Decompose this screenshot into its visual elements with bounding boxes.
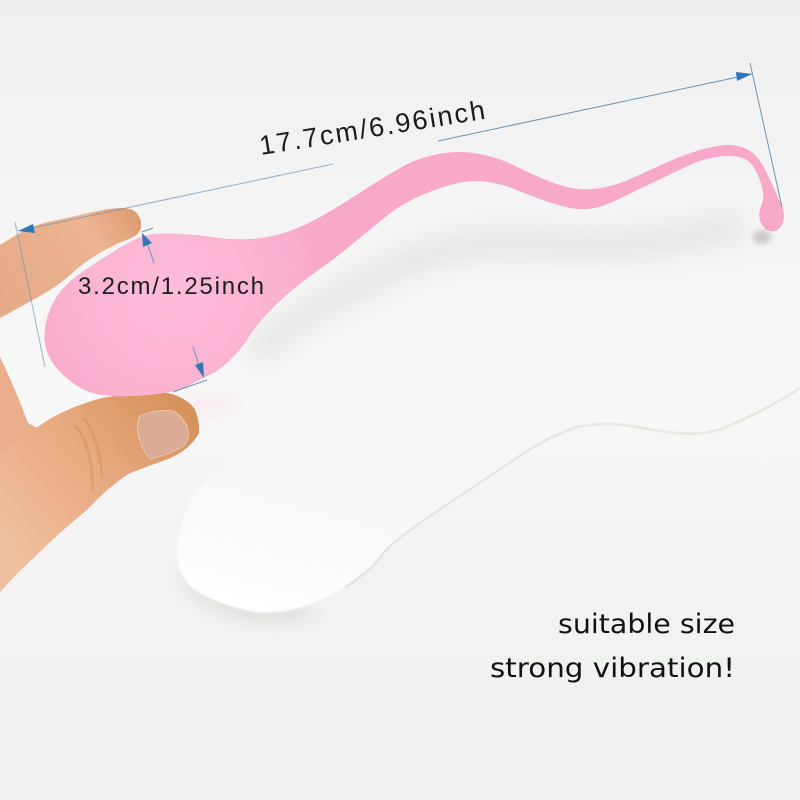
caption: strong vibration: strong vibration! (490, 653, 735, 684)
label: length: 17.7cm/6.96inch (257, 95, 487, 161)
soft shadows under products (174, 225, 771, 620)
thumbnail (137, 411, 188, 459)
hand: lower thumb (0, 393, 199, 592)
caption: suitable size: suitable size (558, 609, 735, 640)
product: pink silicone unit (44, 145, 784, 396)
dimension: width arrows (142, 228, 207, 392)
product: white silicone unit (177, 345, 800, 613)
dimension: length line with arrows (15, 63, 782, 367)
white unit lower edge line (345, 388, 800, 588)
hand: upper finger (0, 208, 141, 318)
label: width: 3.2cm/1.25inch (78, 273, 264, 300)
knuckle creases (75, 418, 102, 490)
hand: palm edge (0, 357, 60, 470)
